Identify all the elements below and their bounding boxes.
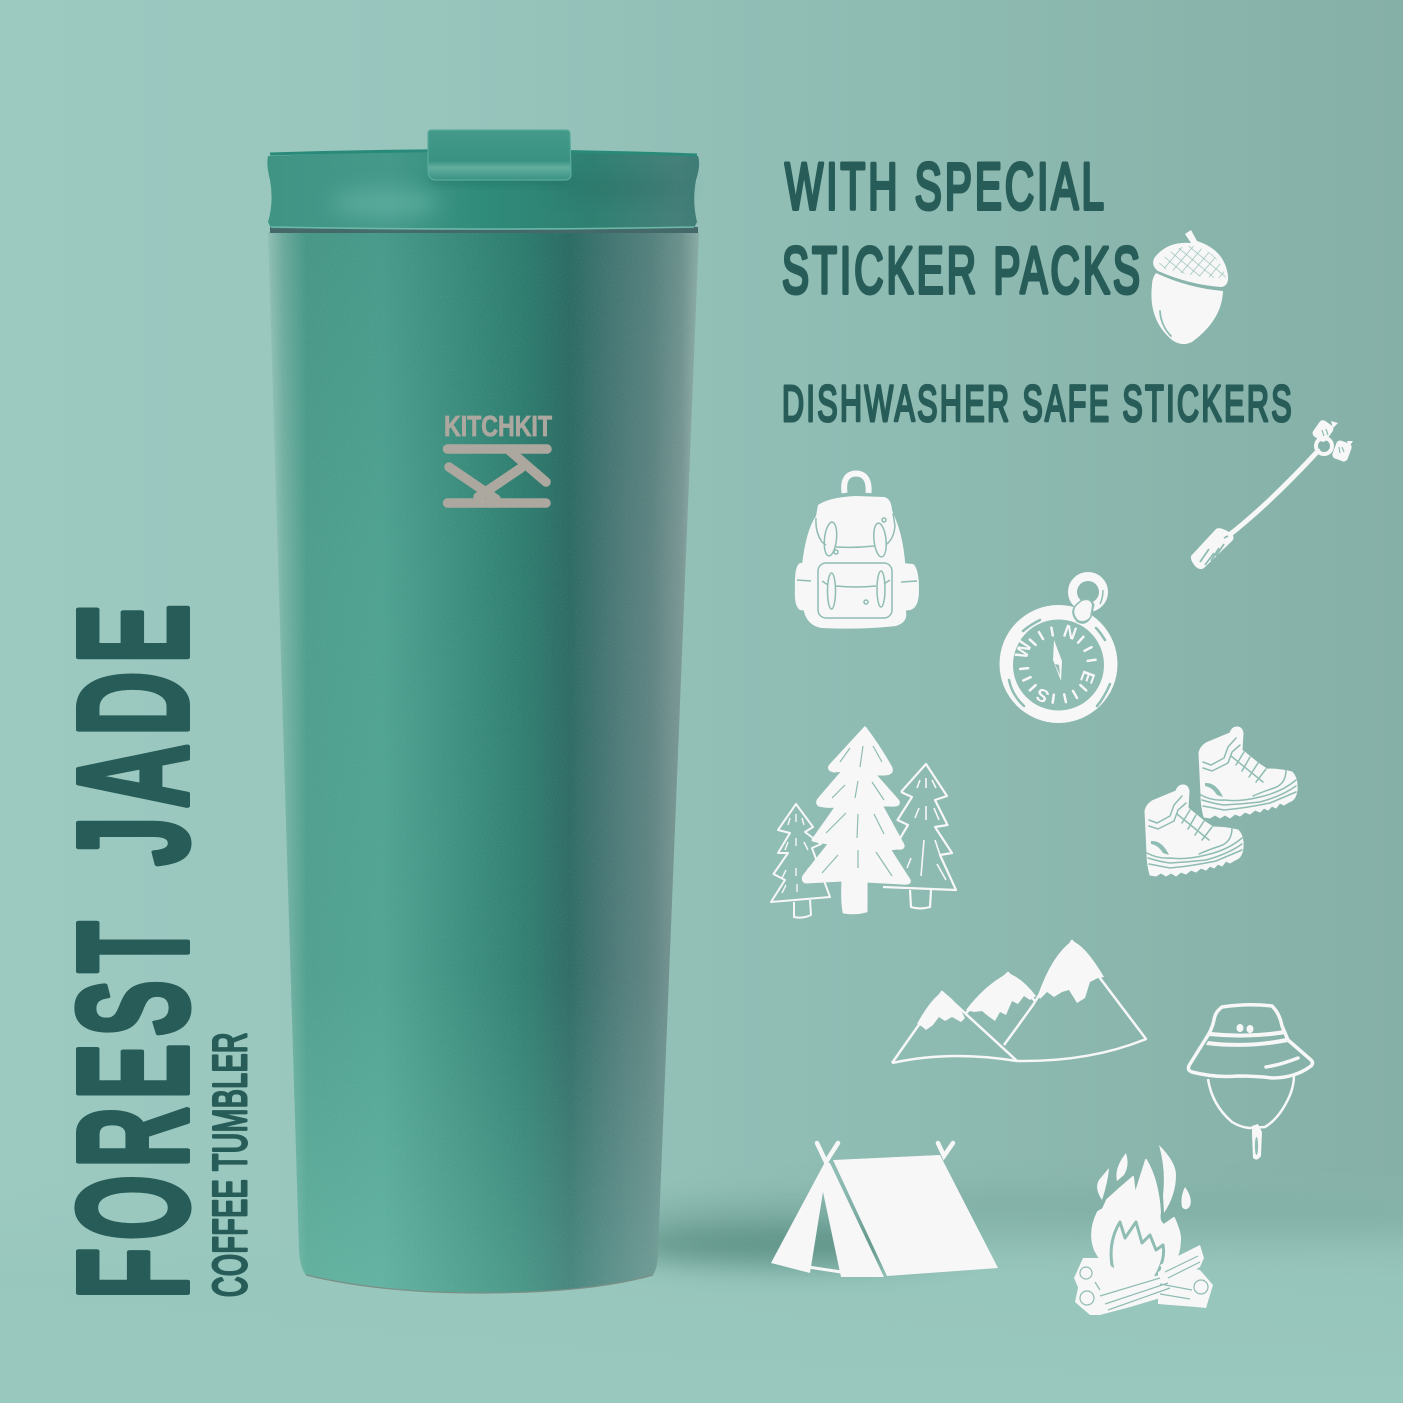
icon: campfire [1074, 1145, 1213, 1315]
icon: mountains [892, 941, 1146, 1063]
icon: compass: E [1076, 668, 1099, 686]
icon: marshmallow stick [1191, 419, 1353, 569]
icon: compass: N [1061, 621, 1080, 644]
large centre tree [803, 728, 909, 913]
title: FOREST [46, 914, 221, 1299]
logs [1074, 1258, 1136, 1292]
seam [270, 227, 698, 233]
heading: WITH SPECIAL [785, 149, 1107, 223]
icon: acorn [1151, 230, 1228, 344]
tumbler [260, 130, 705, 1296]
engraved logo: KITCHKIT [444, 411, 552, 443]
icon: compass [1000, 576, 1118, 723]
flames [1092, 1160, 1180, 1280]
title: JADE [46, 596, 221, 866]
small left tree [771, 804, 830, 918]
icon: hiking boots [1145, 727, 1297, 876]
tall right tree [883, 764, 956, 908]
heading: STICKER PACKS [782, 233, 1143, 307]
tumbler shadow on the floor [620, 1222, 960, 1266]
icon: tent [771, 1143, 998, 1277]
engraved logo [444, 411, 552, 503]
lid tab [428, 130, 571, 184]
lid [267, 130, 699, 230]
icon: compass: W [1011, 639, 1036, 661]
heading [782, 149, 1143, 307]
subtitle: COFFEE TUMBLER [203, 1032, 256, 1297]
tumbler body [268, 232, 699, 1293]
icon: backpack [795, 474, 919, 629]
icon: pine trees [771, 728, 956, 918]
icon: bucket hat [1188, 1005, 1312, 1160]
icon: compass: S [1033, 684, 1052, 707]
